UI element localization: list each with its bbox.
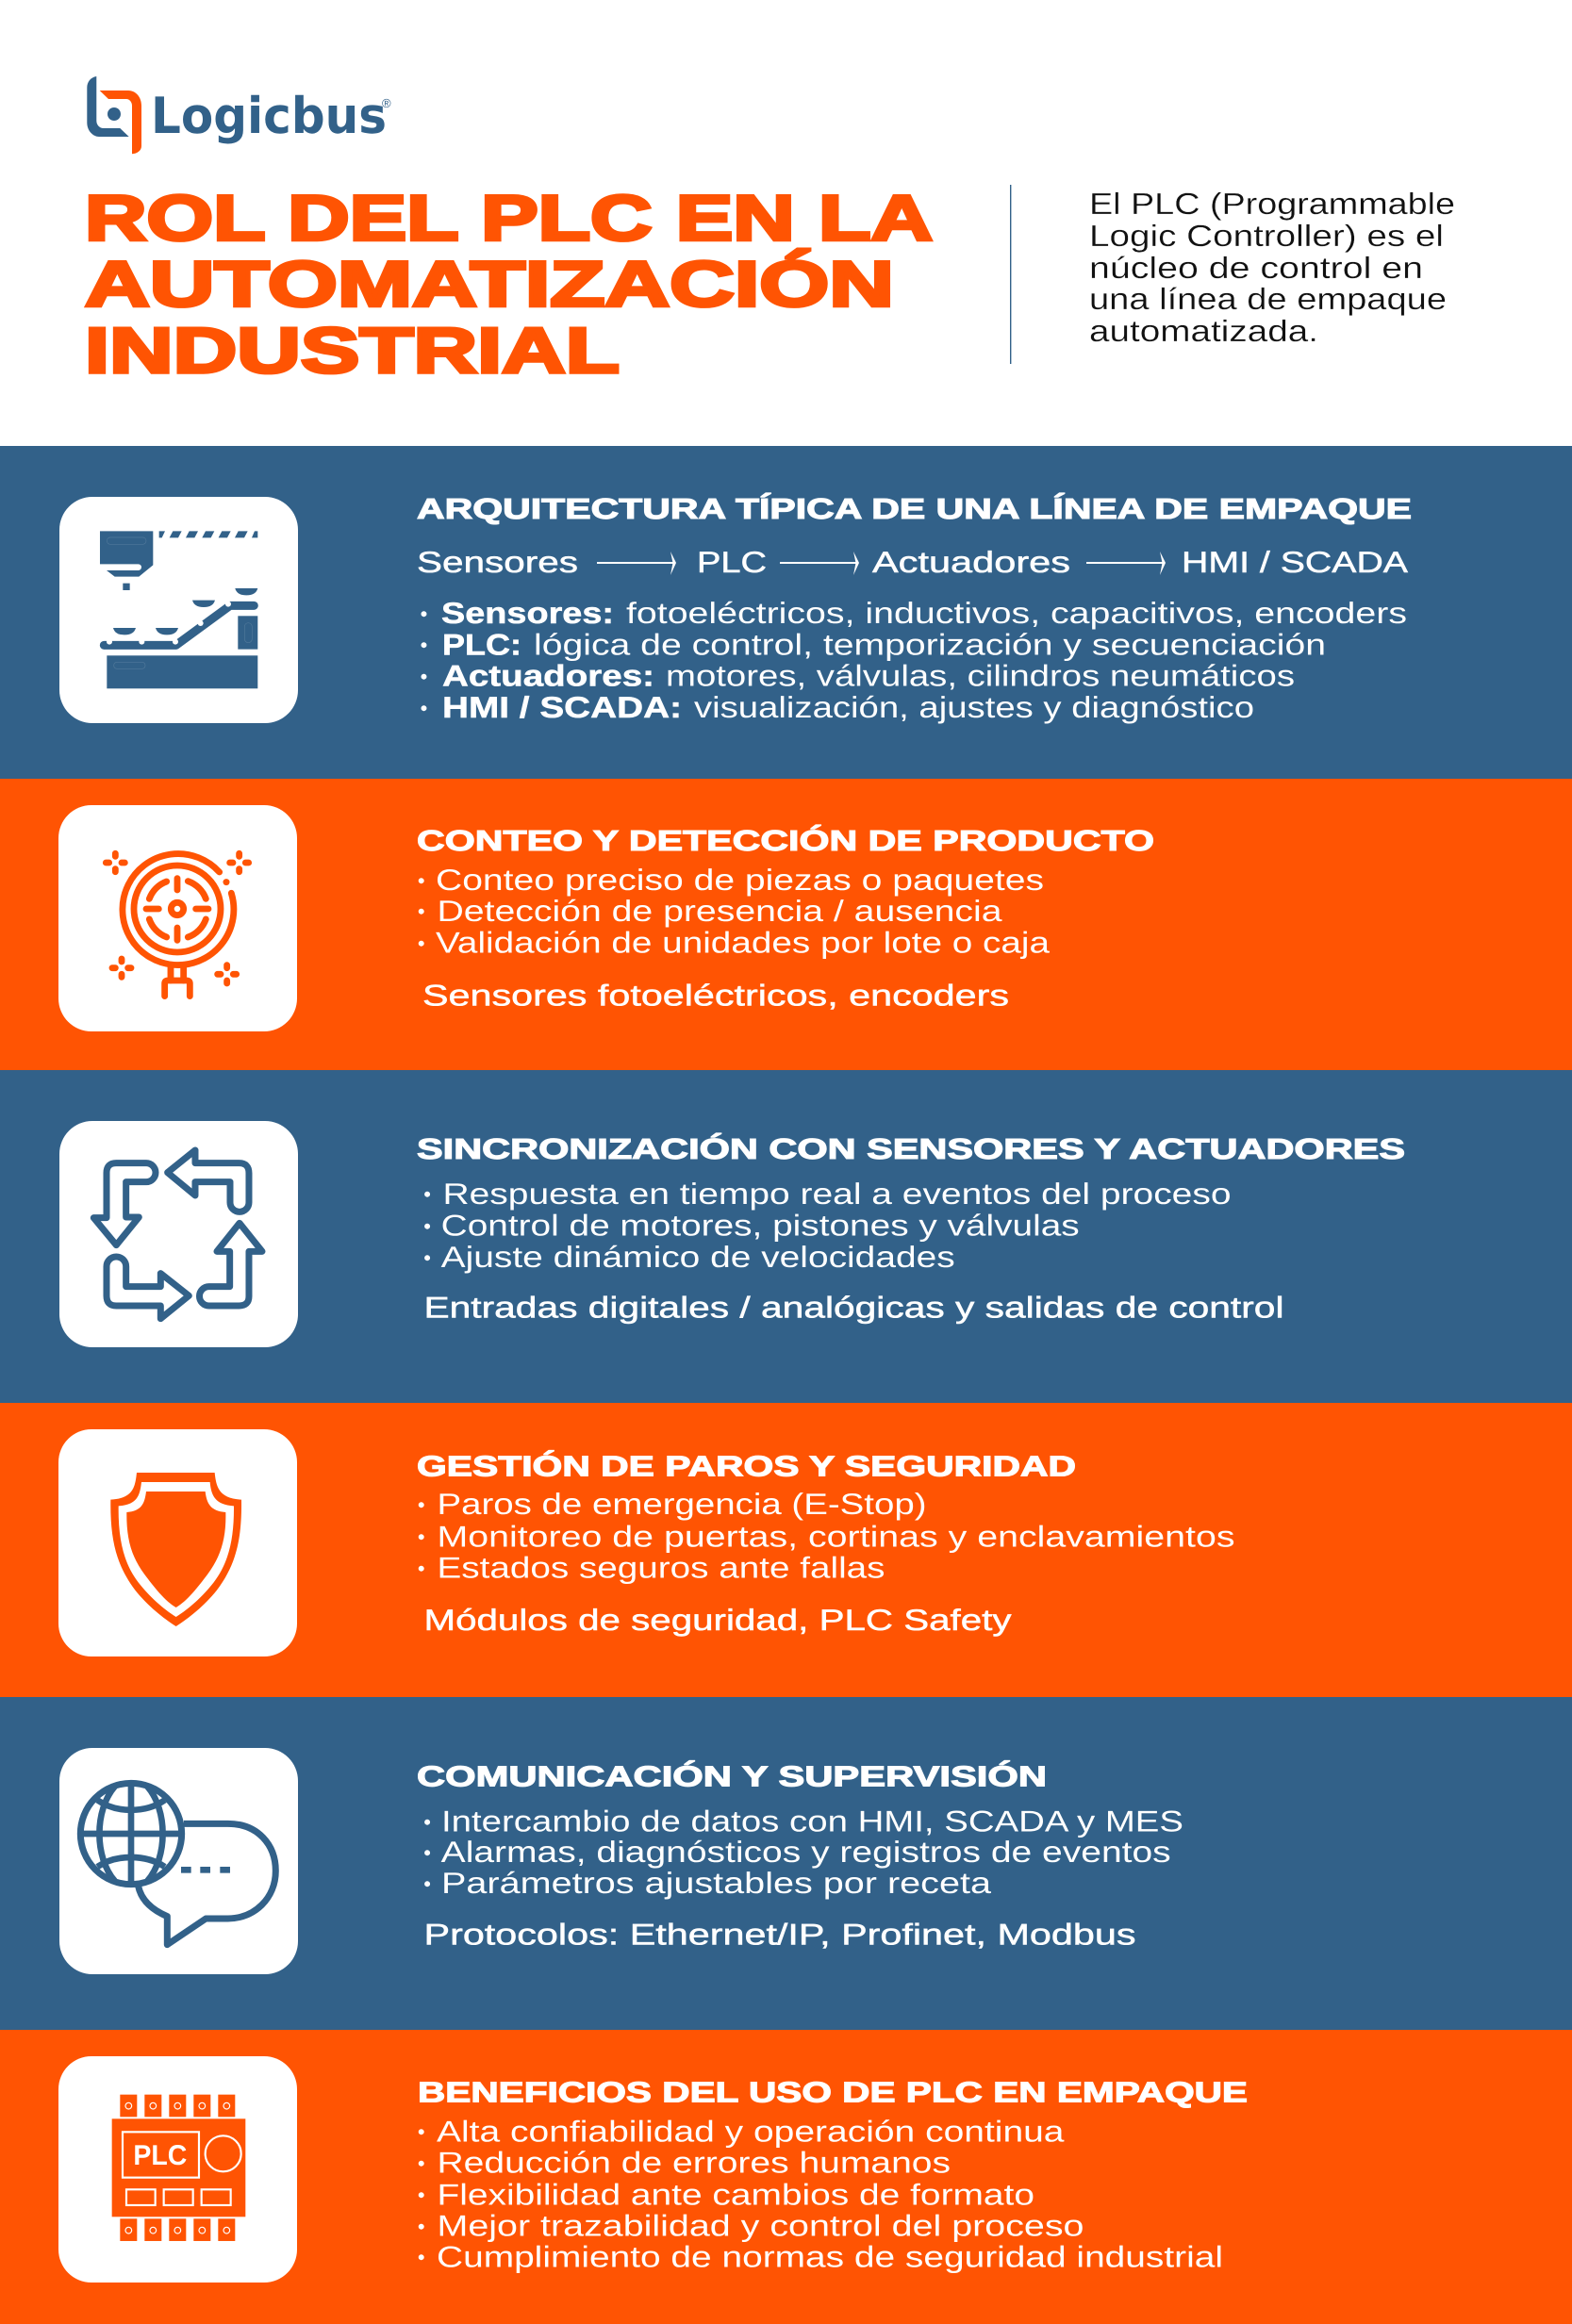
icon: globe and chat bubble bbox=[59, 1748, 298, 1974]
title: AUTOMATIZACIÓN bbox=[85, 249, 894, 321]
arrow bbox=[1086, 552, 1166, 575]
bullet list: Cumplimiento de normas de seguridad industrial bbox=[437, 2239, 1223, 2273]
bullet list: Ajuste dinámico de velocidades bbox=[441, 1240, 955, 1274]
bullet list: visualización, ajustes y diagnóstico bbox=[694, 690, 1254, 724]
heading: COMUNICACIÓN Y SUPERVISIÓN bbox=[417, 1759, 1047, 1792]
heading: BENEFICIOS DEL USO DE PLC EN EMPAQUE bbox=[418, 2076, 1248, 2108]
icon: target sensor bbox=[58, 805, 297, 1031]
panel: sincronización bbox=[0, 1070, 1572, 1403]
title: INDUSTRIAL bbox=[85, 315, 620, 387]
bullet list: Validación de unidades por lote o caja bbox=[436, 926, 1051, 960]
bullet list: • bbox=[418, 2184, 425, 2207]
bullet list: Estados seguros ante fallas bbox=[438, 1550, 885, 1584]
bullet list: • bbox=[421, 634, 427, 657]
bullet list: • bbox=[418, 1557, 425, 1580]
summary: Sensores fotoeléctricos, encoders bbox=[422, 978, 1009, 1012]
bullet list: Parámetros ajustables por receta bbox=[441, 1866, 992, 1900]
flow: sensores to HMI: Actuadores bbox=[872, 545, 1070, 579]
logo: Logicbus: ® bbox=[382, 96, 391, 110]
bullet list: motores, válvulas, cilindros neumáticos bbox=[666, 659, 1295, 693]
bullet list: • bbox=[418, 2120, 425, 2144]
bullet list: • bbox=[421, 602, 427, 625]
bullet list: Mejor trazabilidad y control del proceso bbox=[438, 2209, 1084, 2243]
bullet list: • bbox=[418, 2151, 425, 2175]
bullet list: • bbox=[418, 2215, 425, 2238]
bullet list: Sensores: bbox=[441, 596, 614, 630]
bullet list: lógica de control, temporización y secuenciación bbox=[534, 627, 1326, 661]
heading: ARQUITECTURA TÍPICA DE UNA LÍNEA DE EMPAQUE bbox=[417, 492, 1412, 525]
icon: PLC module: PLC bbox=[133, 2139, 187, 2171]
intro text: El PLC (Programmable bbox=[1089, 187, 1455, 221]
bullet list: • bbox=[418, 1525, 425, 1549]
bullet list: PLC: bbox=[442, 627, 521, 661]
heading: GESTIÓN DE PAROS Y SEGURIDAD bbox=[417, 1449, 1076, 1482]
logo: Logicbus bbox=[87, 76, 391, 154]
bullet list: Alta confiabilidad y operación continua bbox=[437, 2114, 1065, 2148]
summary: Protocolos: Ethernet/IP, Profinet, Modbus bbox=[424, 1918, 1135, 1952]
logo: Logicbus: Logicbus bbox=[151, 88, 387, 145]
intro text: núcleo de control en bbox=[1089, 251, 1423, 285]
intro text: automatizada. bbox=[1089, 314, 1318, 348]
icon: shield bbox=[58, 1429, 297, 1656]
title: ROL DEL PLC EN LA bbox=[85, 183, 933, 255]
bullet list: Flexibilidad ante cambios de formato bbox=[438, 2177, 1034, 2211]
bullet list bbox=[423, 1804, 1183, 1900]
bullet list: • bbox=[418, 899, 425, 923]
bullet list: Alarmas, diagnósticos y registros de eventos bbox=[441, 1835, 1171, 1869]
arrow bbox=[780, 552, 859, 575]
bullet list: • bbox=[423, 1245, 431, 1269]
arrow bbox=[597, 552, 676, 575]
summary: Módulos de seguridad, PLC Safety bbox=[424, 1603, 1012, 1637]
bullet list bbox=[421, 596, 1407, 724]
bullet list: • bbox=[418, 868, 425, 892]
bullet list: • bbox=[418, 931, 425, 955]
icon: cycle arrows bbox=[59, 1121, 298, 1347]
bullet list bbox=[418, 1487, 1234, 1584]
bullet list: • bbox=[423, 1840, 431, 1864]
bullet list: • bbox=[423, 1214, 431, 1238]
panel: gestión de paros bbox=[0, 1403, 1572, 1697]
bullet list: Monitoreo de puertas, cortinas y enclavamientos bbox=[438, 1519, 1235, 1553]
bullet list: Intercambio de datos con HMI, SCADA y MES bbox=[441, 1804, 1183, 1838]
heading: CONTEO Y DETECCIÓN DE PRODUCTO bbox=[417, 824, 1154, 857]
bullet list: • bbox=[423, 1182, 431, 1206]
bullet list: HMI / SCADA: bbox=[442, 690, 682, 724]
flow: sensores to HMI: Sensores bbox=[417, 545, 578, 579]
header bbox=[85, 76, 1455, 387]
bullet list: • bbox=[421, 665, 427, 688]
bullet list: Conteo preciso de piezas o paquetes bbox=[436, 863, 1044, 897]
summary: Entradas digitales / analógicas y salidas de control bbox=[424, 1290, 1284, 1324]
bullet list: • bbox=[423, 1871, 431, 1895]
bullet list: Control de motores, pistones y válvulas bbox=[441, 1209, 1080, 1243]
panel: beneficios bbox=[0, 2030, 1572, 2324]
bullet list: Reducción de errores humanos bbox=[438, 2146, 951, 2180]
bullet list bbox=[423, 1177, 1232, 1274]
bullet list: • bbox=[418, 1492, 425, 1516]
panel: comunicación y supervisión bbox=[0, 1697, 1572, 2030]
intro text: Logic Controller) es el bbox=[1089, 219, 1444, 253]
panel: conteo y detección bbox=[0, 779, 1572, 1070]
heading: SINCRONIZACIÓN CON SENSORES Y ACTUADORES bbox=[417, 1132, 1405, 1165]
icon: packaging line machine bbox=[59, 497, 298, 723]
bullet list: • bbox=[418, 2246, 425, 2269]
intro text: una línea de empaque bbox=[1089, 282, 1447, 316]
bullet list: Detección de presencia / ausencia bbox=[438, 894, 1002, 928]
intro text bbox=[1089, 187, 1455, 348]
bullet list bbox=[418, 2114, 1223, 2273]
title bbox=[85, 183, 933, 387]
flow: sensores to HMI: PLC bbox=[697, 545, 767, 579]
bullet list: • bbox=[421, 696, 427, 719]
bullet list: Actuadores: bbox=[442, 659, 654, 693]
bullet list: fotoeléctricos, inductivos, capacitivos, encoders bbox=[626, 596, 1407, 630]
bullet list: Paros de emergencia (E-Stop) bbox=[438, 1487, 926, 1521]
bullet list: Respuesta en tiempo real a eventos del proceso bbox=[443, 1177, 1232, 1211]
bullet list bbox=[418, 863, 1051, 960]
icon: PLC module bbox=[58, 2056, 297, 2283]
flow: sensores to HMI: HMI / SCADA bbox=[1182, 545, 1408, 579]
flow: sensores to HMI bbox=[417, 545, 1408, 579]
bullet list: • bbox=[423, 1810, 431, 1834]
panel: arquitectura típica bbox=[0, 446, 1572, 779]
